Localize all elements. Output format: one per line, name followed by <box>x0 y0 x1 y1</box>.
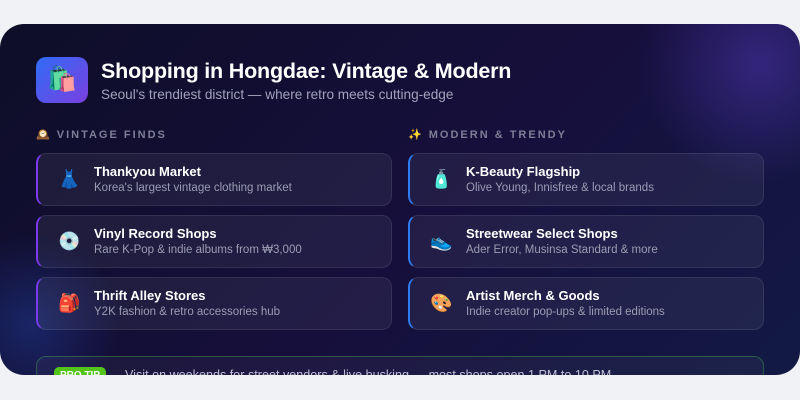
card: artist merch <box>408 277 764 330</box>
card: Thankyou Market: Thankyou Market <box>94 164 201 179</box>
card: thrift: Y2K fashion & retro accessories hub <box>94 306 280 318</box>
card: vinyl: 💿 <box>58 231 80 251</box>
card: streetwear: Streetwear Select Shops <box>466 226 618 241</box>
card: k-beauty <box>408 153 764 206</box>
callout: pro tip <box>36 356 764 400</box>
subtitle: Seoul's trendiest district — where retro meets cutting-edge <box>101 87 453 102</box>
card: vinyl <box>36 215 392 268</box>
card: thrift: Thrift Alley Stores <box>94 288 205 303</box>
card: Thankyou Market: 👗 <box>58 169 80 189</box>
card: thrift <box>36 277 392 330</box>
card: artist merch: 🎨 <box>430 293 452 313</box>
card: artist merch: Indie creator pop-ups & limited editions <box>466 306 665 318</box>
card: thrift: 🎒 <box>58 293 80 313</box>
card: k-beauty: 🧴 <box>430 169 452 189</box>
icon: shopping bags <box>36 57 88 103</box>
card: Thankyou Market <box>36 153 392 206</box>
heading: modern: ✨ MODERN & TRENDY <box>408 129 567 141</box>
title: Shopping in Hongdae: Vintage & Modern <box>101 59 511 83</box>
card: Thankyou Market: Korea's largest vintage clothing market <box>94 182 292 194</box>
card: vinyl: Vinyl Record Shops <box>94 226 217 241</box>
card: vinyl: Rare K-Pop & indie albums from ₩3,000 <box>94 244 302 256</box>
heading: vintage finds: 🕰️ VINTAGE FINDS <box>36 129 167 141</box>
card: streetwear: Ader Error, Musinsa Standard & more <box>466 244 658 256</box>
card: streetwear <box>408 215 764 268</box>
icon: shopping bags: 🛍️ <box>47 66 77 93</box>
card: artist merch: Artist Merch & Goods <box>466 288 600 303</box>
card: k-beauty: Olive Young, Innisfree & local brands <box>466 182 654 194</box>
card: k-beauty: K-Beauty Flagship <box>466 164 580 179</box>
card: streetwear: 👟 <box>430 231 452 251</box>
